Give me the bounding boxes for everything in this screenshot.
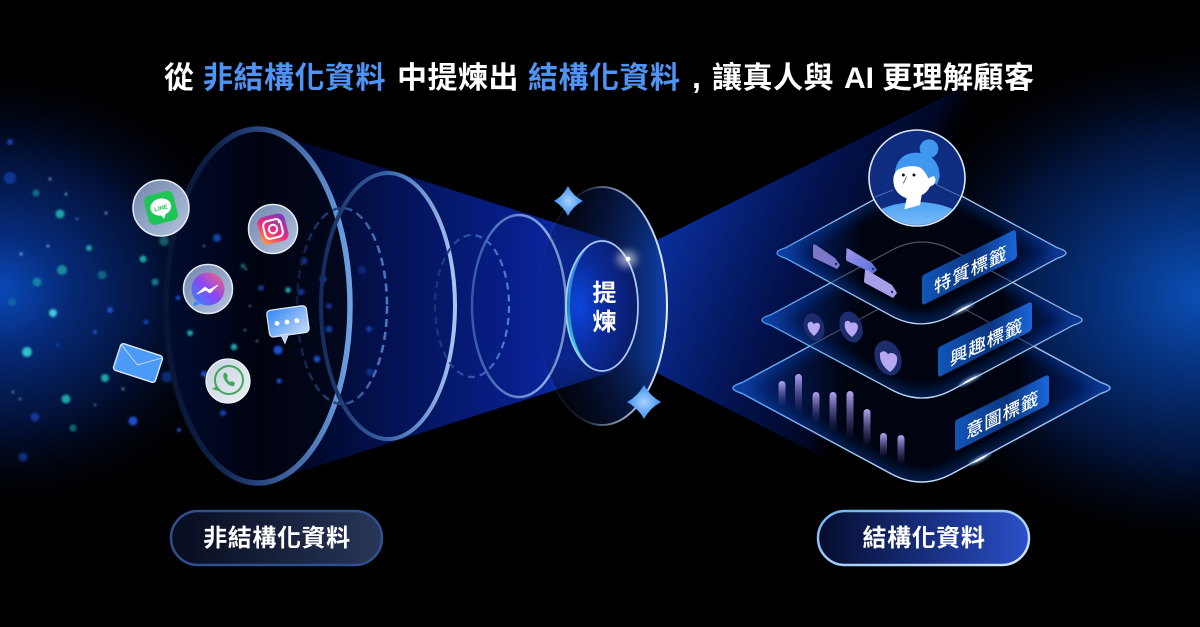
funnel body xyxy=(166,128,612,485)
star bottom xyxy=(627,385,661,419)
dashed ring 1 xyxy=(297,208,387,404)
label: trait tags: 特質標籤 xyxy=(934,242,1007,298)
title: 中提煉出 xyxy=(397,62,519,95)
pill: structured data: 結構化資料 xyxy=(862,525,986,552)
inner lens with refine label xyxy=(566,241,638,371)
title: 結構化資料 xyxy=(528,62,680,95)
sparkle layer 1 xyxy=(950,300,976,318)
right blue glow xyxy=(860,0,1200,627)
avatar xyxy=(868,129,966,227)
label: interest tags xyxy=(938,302,1032,377)
ring 3 xyxy=(472,215,566,397)
sparkle layer 2 xyxy=(957,371,983,389)
icon: WhatsApp xyxy=(206,359,250,403)
faint top edge of layer 3 seen through layer 2 xyxy=(809,309,1034,346)
icon: envelope xyxy=(113,343,163,383)
icon: chat bubble xyxy=(266,305,311,345)
icon: Messenger xyxy=(184,264,232,314)
inner lens with refine label: 煉 xyxy=(592,309,616,336)
ring 1 xyxy=(166,129,350,483)
bar chart xyxy=(778,374,904,465)
label: intent tags: 意圖標籤 xyxy=(966,387,1039,443)
layer 2: interest xyxy=(761,282,1083,399)
funnel mouth interior xyxy=(166,129,350,483)
pill: structured data xyxy=(818,511,1029,565)
dashed ring 2 xyxy=(435,235,509,377)
title: 更理解顧客 xyxy=(882,62,1034,95)
label: intent tags xyxy=(955,375,1049,451)
label: refine: 提 xyxy=(592,280,616,307)
right light beam xyxy=(655,44,1050,572)
label: trait tags xyxy=(922,230,1017,305)
label: interest tags: 興趣標籤 xyxy=(950,314,1023,370)
title: , xyxy=(692,59,701,95)
title xyxy=(164,59,1034,95)
pill: unstructured data xyxy=(171,511,382,565)
title: 讓真人與 xyxy=(712,61,834,95)
hearts xyxy=(800,308,906,379)
icon: LINE xyxy=(133,180,189,236)
title: 從 xyxy=(164,62,194,95)
layer 1: traits xyxy=(776,196,1067,324)
title: 非結構化資料 xyxy=(203,62,386,95)
lens sparkle xyxy=(617,251,637,267)
ring 2 xyxy=(321,173,455,439)
faint top edge of layer 2 seen through layer 1 xyxy=(830,241,1013,283)
tag icons xyxy=(813,244,897,298)
icon: Instagram xyxy=(248,204,298,254)
star top xyxy=(554,186,583,216)
particles xyxy=(4,139,374,462)
title: AI xyxy=(844,62,874,95)
pill: unstructured data: 非結構化資料 xyxy=(203,525,351,552)
layer 3: intent xyxy=(732,346,1111,483)
left blue glow xyxy=(0,0,280,627)
outer lens xyxy=(537,187,667,425)
icon: LINE: LINE xyxy=(154,204,169,214)
sparkle layer 3 xyxy=(967,450,993,468)
